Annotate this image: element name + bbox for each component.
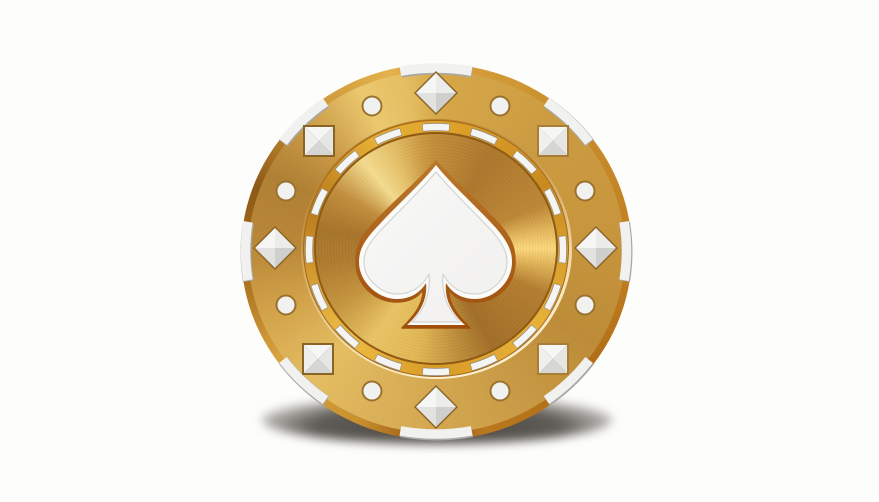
- gold face of rim: [248, 71, 625, 433]
- diamond top: [414, 71, 458, 115]
- diamond bottom: [414, 385, 458, 429]
- square top left: [303, 125, 335, 157]
- square top right: [537, 125, 569, 157]
- ground shadow: [262, 396, 612, 444]
- pale line above rim: [301, 119, 572, 379]
- square bottom left: [302, 343, 334, 375]
- outer gold rim: [241, 64, 632, 440]
- diamond right: [574, 226, 618, 270]
- diamond left: [253, 226, 297, 270]
- inner ring: [303, 120, 569, 377]
- diamond studs: [253, 71, 618, 429]
- white edge segments: [246, 68, 627, 435]
- square bottom right: [537, 343, 569, 375]
- spade outline: [356, 161, 515, 328]
- square studs: [302, 125, 569, 375]
- round studs: [276, 96, 594, 400]
- poker chip: [244, 67, 630, 437]
- inner ring dashes: [309, 127, 563, 372]
- spade inner bevel: [364, 172, 507, 322]
- spade white fill: [359, 165, 512, 325]
- central gold disc: [314, 132, 558, 365]
